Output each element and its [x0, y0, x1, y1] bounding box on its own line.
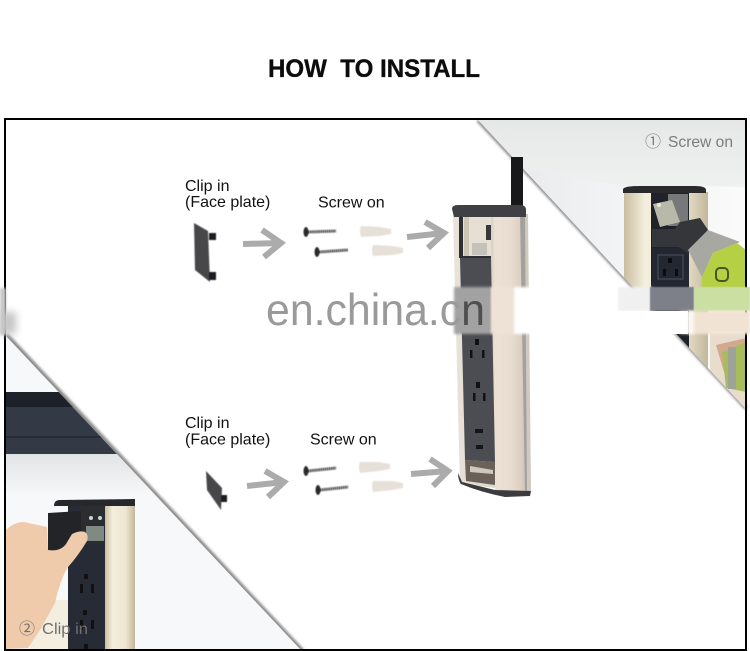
arrow: bottom right [411, 459, 448, 486]
panel: photo step 1 screw on [478, 120, 746, 413]
step label 2 [19, 615, 88, 639]
icon: face plate bottom [206, 471, 227, 510]
icon: face plate top [194, 223, 216, 282]
socket 1 [470, 339, 484, 358]
right edge shadow [520, 214, 527, 492]
panel: photo step 2 clip in [6, 335, 306, 651]
step label 2: ② [19, 615, 35, 639]
product: pop-up power socket [452, 205, 531, 497]
title: HOW TO INSTALL [268, 55, 480, 83]
label: clip in top: Clip in [185, 178, 229, 195]
icon: wall anchors bottom [359, 462, 403, 492]
label: clip in bottom: (Face plate) [185, 432, 270, 448]
diagonal shadow edge top right [478, 120, 746, 408]
cable [511, 157, 523, 206]
arrow: top right [407, 222, 444, 248]
arrow: bottom left [247, 471, 284, 497]
arrow: top left [243, 230, 281, 257]
step label 1: Screw on [668, 134, 733, 151]
diagonal shadow edge bottom left [6, 335, 302, 651]
label: screw on top: Screw on [318, 194, 385, 212]
top window [459, 217, 491, 258]
icon: screws bottom [304, 466, 348, 495]
metal face [491, 214, 525, 492]
icon: screws top [304, 227, 348, 257]
step label 2: Clip in [42, 621, 88, 638]
dark socket panel [460, 258, 495, 462]
bottom window [465, 460, 495, 485]
product body [453, 214, 531, 492]
watermark text: en.china.cn [266, 286, 485, 335]
bottom cap [458, 473, 531, 497]
usb ports [475, 429, 483, 449]
label: clip in bottom: Clip in [185, 415, 229, 432]
step label 1: ① [645, 128, 661, 152]
step label 1 [645, 128, 733, 152]
watermark band [0, 287, 750, 335]
socket 2 [473, 382, 486, 401]
top cap [452, 205, 526, 217]
label: screw on bottom: Screw on [310, 432, 377, 448]
label: clip in top: (Face plate) [185, 194, 270, 211]
icon: wall anchors top [360, 226, 403, 256]
